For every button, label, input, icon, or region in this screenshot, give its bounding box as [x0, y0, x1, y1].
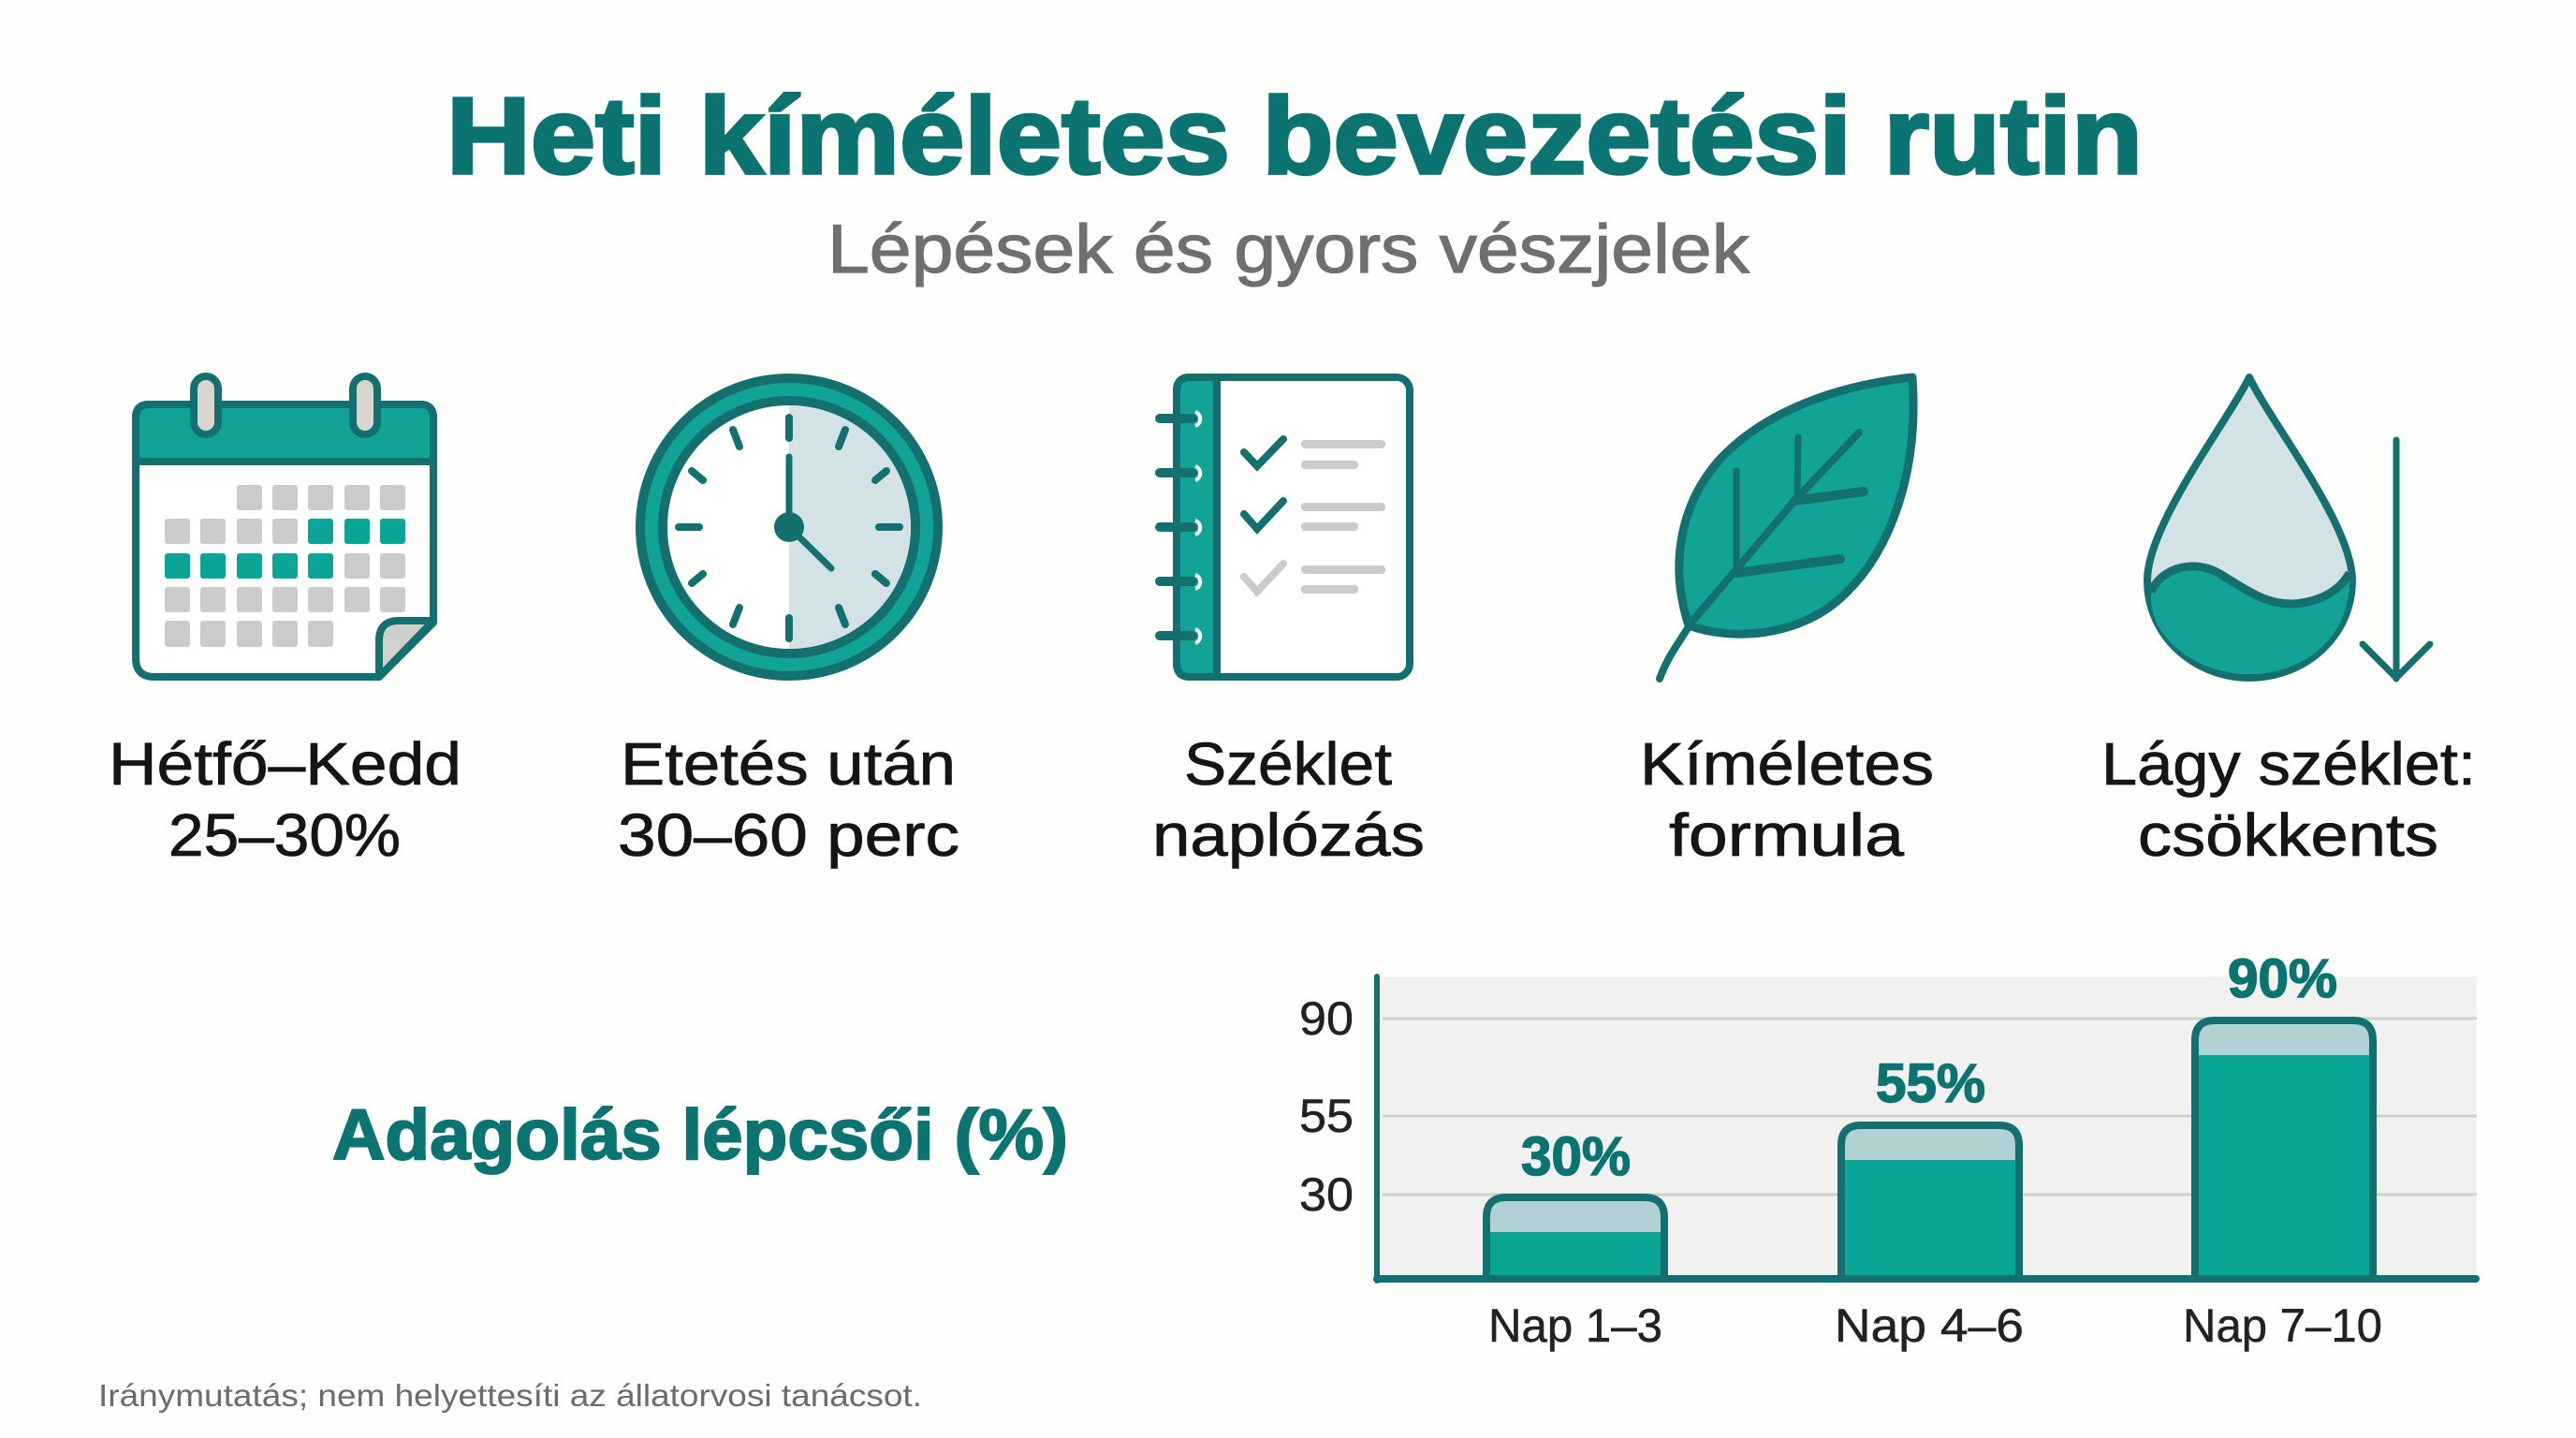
chart heading: Adagolás lépcsői (%): [332, 1095, 1068, 1175]
icon: calendar: [136, 376, 433, 677]
label: gentle formula: Kíméletes: [1640, 730, 1934, 798]
value labels: 55%: [1876, 1053, 1985, 1114]
x axis labels: Nap 7–10: [2183, 1299, 2382, 1352]
y axis labels: 30: [1299, 1168, 1354, 1221]
x axis labels: [1488, 1299, 2382, 1352]
icon: leaf: [1660, 377, 1913, 679]
footnote: Iránymutatás; nem helyettesíti az állatorvosi tanácsot.: [98, 1378, 922, 1413]
label: Monday-Tuesday: 25–30%: [168, 801, 401, 869]
bar chart: [1299, 948, 2477, 1352]
icon: clock: [640, 378, 938, 676]
y axis labels: 90: [1299, 992, 1354, 1045]
label: Monday-Tuesday: Hétfő–Kedd: [109, 730, 461, 798]
x axis labels: Nap 4–6: [1835, 1299, 2024, 1352]
y axis labels: [1299, 992, 1354, 1221]
icon: notebook checklist: [1160, 377, 1410, 677]
label: Monday-Tuesday: [109, 730, 461, 869]
value labels: 90%: [2228, 948, 2337, 1009]
label: stool log: naplózás: [1152, 801, 1425, 869]
x axis labels: Nap 1–3: [1488, 1299, 1662, 1352]
label: stool log: [1152, 730, 1425, 869]
value labels: 30%: [1521, 1126, 1631, 1187]
icon: water drop with down arrow: [2147, 377, 2430, 679]
label: gentle formula: [1640, 730, 1934, 869]
label: gentle formula: formula: [1669, 801, 1904, 869]
subtitle: Lépések és gyors vészjelek: [827, 212, 1750, 287]
value labels: [1521, 948, 2337, 1187]
title: Heti kíméletes bevezetési rutin: [446, 75, 2143, 197]
label: soft stool reduce: [2101, 730, 2476, 869]
label: soft stool reduce: csökkents: [2138, 801, 2438, 869]
y axis labels: 55: [1299, 1090, 1354, 1142]
label: after feeding: 30–60 perc: [618, 801, 959, 869]
bar: day 7-10: [2195, 1020, 2373, 1279]
bar: day 4-6: [1841, 1125, 2019, 1279]
label: stool log: Széklet: [1184, 730, 1392, 798]
label: soft stool reduce: Lágy széklet:: [2101, 730, 2476, 798]
label: after feeding: [618, 730, 959, 869]
bar: day 1-3: [1486, 1197, 1664, 1279]
label: after feeding: Etetés után: [621, 730, 956, 798]
